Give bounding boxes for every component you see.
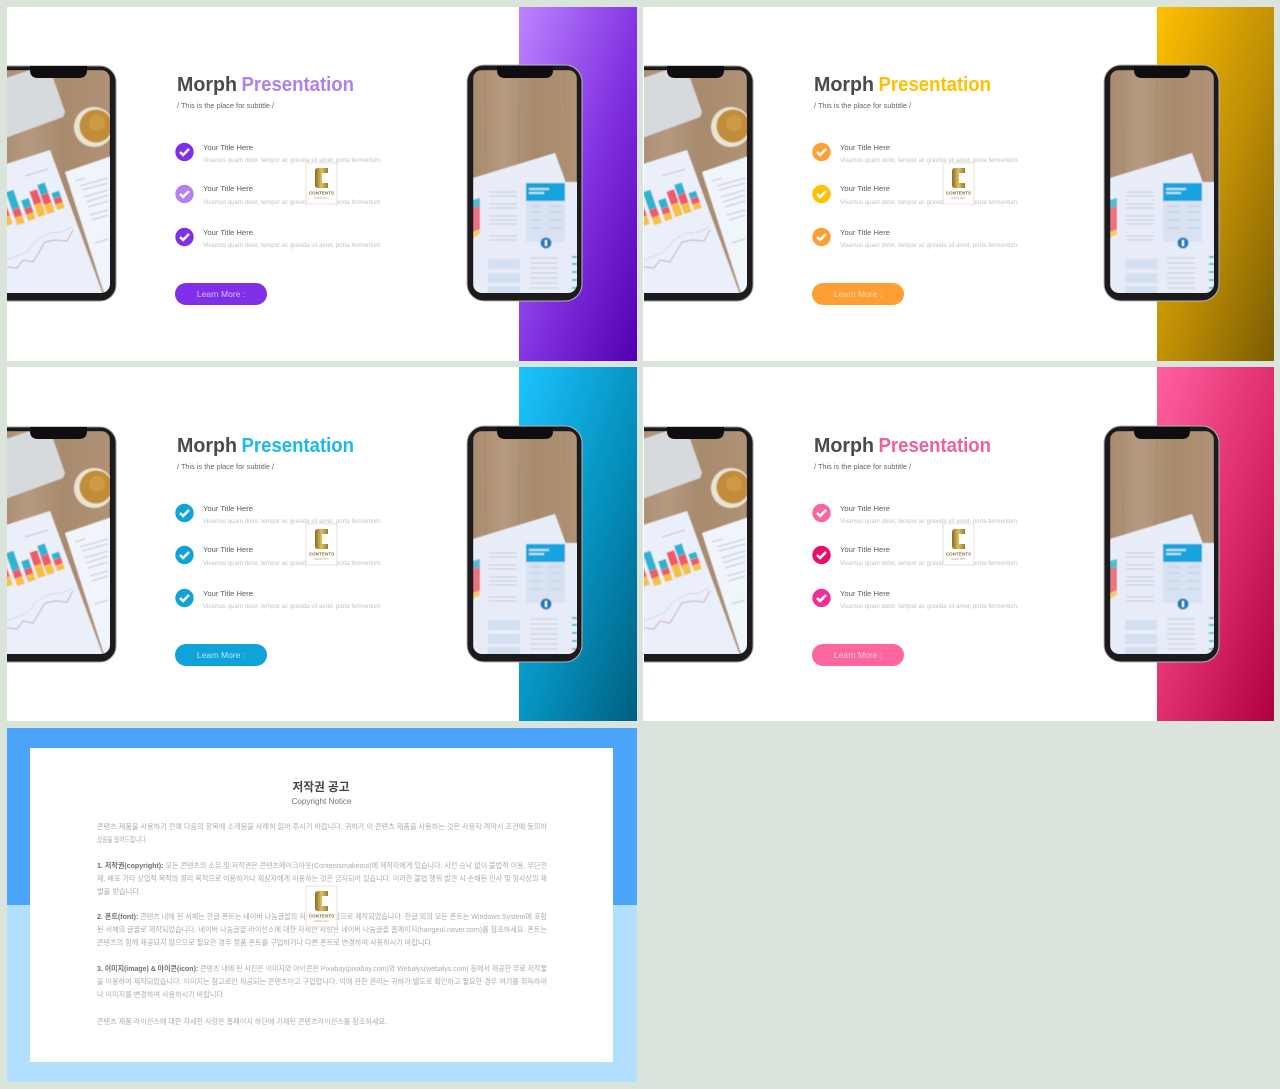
section 3: image and icon	[97, 963, 547, 999]
list item 3	[812, 228, 1019, 249]
icon: check	[812, 546, 831, 564]
list item 2: Vivamus quam dolor, tempor ac gravida sit amet, porta fermentum.	[203, 200, 382, 206]
section 1: copyright	[97, 860, 547, 896]
button: Learn More :	[197, 650, 245, 660]
list item 1: Your Title Here	[203, 143, 253, 152]
section 1: copyright: 벌을 받습니다.	[97, 886, 141, 896]
right phone mockup	[1104, 426, 1219, 662]
icon: check	[812, 504, 831, 522]
gradient band	[519, 7, 637, 361]
list item 3: Your Title Here	[840, 228, 890, 237]
section 3: image and icon: 3. 이미지(image) & 아이콘(icon): 콘텐츠 내에 된 사진은 이미지와 아이콘은 Pixabay(pixabay.com)와 Webalys(webalys.com) 등에서 제공한 무료 저작물	[97, 963, 547, 973]
list item 1: Vivamus quam dolor, tempor ac gravida sit amet, porta fermentum.	[203, 158, 382, 164]
watermark	[306, 886, 337, 927]
watermark	[306, 163, 337, 204]
list item 1: Your Title Here	[840, 143, 890, 152]
list item 1	[812, 143, 1019, 164]
gradient band	[519, 367, 637, 721]
heading: Morph	[814, 435, 874, 457]
subtitle: / This is the place for subtitle /	[814, 462, 912, 471]
right phone mockup	[467, 65, 582, 301]
intro text	[97, 821, 547, 844]
left phone mockup	[0, 66, 116, 301]
watermark	[306, 524, 337, 565]
right phone mockup	[1104, 65, 1219, 301]
list item 3: Vivamus quam dolor, tempor ac gravida sit amet, porta fermentum.	[840, 243, 1019, 249]
subtitle: / This is the place for subtitle /	[177, 462, 275, 471]
list item 3: Vivamus quam dolor, tempor ac gravida sit amet, porta fermentum.	[840, 604, 1019, 610]
list item 2: Your Title Here	[203, 545, 253, 554]
heading	[814, 74, 991, 96]
watermark	[943, 524, 974, 565]
gradient band	[1157, 7, 1274, 361]
list item 2: Vivamus quam dolor, tempor ac gravida sit amet, porta fermentum.	[840, 200, 1019, 206]
button	[175, 283, 267, 305]
list item 3: Your Title Here	[203, 228, 253, 237]
list item 3: Your Title Here	[203, 589, 253, 598]
right phone mockup	[467, 426, 582, 662]
button	[812, 283, 904, 305]
list item 1: Your Title Here	[203, 504, 253, 513]
button: Learn More :	[834, 650, 882, 660]
section 2: font: 된 서체의 글꼴로 제작되었습니다. 네이버 나눔글꼴 라이선스에 대한 자세한 사항은 네이버 나눔글꼴 홈페이지(hangeul.naver.com)를 참조하세요. 폰트는	[97, 924, 547, 934]
heading	[814, 435, 991, 457]
subtitle: / This is the place for subtitle /	[814, 101, 912, 110]
heading: Presentation	[878, 435, 991, 457]
section 3: image and icon: 나 이미지를 변경하여 사용하시기 바랍니다.	[97, 989, 225, 999]
list item 1	[175, 504, 382, 525]
panel: pink slide	[623, 367, 1274, 721]
list item 3	[175, 228, 382, 249]
list item 3: Vivamus quam dolor, tempor ac gravida sit amet, porta fermentum.	[203, 604, 382, 610]
panel: copyright notice	[7, 728, 637, 1082]
icon: check	[175, 143, 194, 161]
icon: check	[175, 185, 194, 203]
icon: check	[812, 143, 831, 161]
closing note: 콘텐츠 제품 라이선스에 대한 자세한 사항은 홈페이지 하단에 기재된 콘텐츠라이선스를 참조하세요.	[97, 1016, 387, 1026]
icon: check	[175, 546, 194, 564]
heading	[177, 435, 354, 457]
heading: Presentation	[242, 74, 354, 96]
section 2: font: 2. 폰트(font): 콘텐츠 내에 된 서체는 한글 폰트는 네이버 나눔글꼴의 저작물을 바탕으로 제작되었습니다. 한글 외의 모든 폰트는 Windows System에 포함	[97, 911, 547, 921]
subtitle: / This is the place for subtitle /	[177, 101, 275, 110]
list item 3: Vivamus quam dolor, tempor ac gravida sit amet, porta fermentum.	[203, 243, 382, 249]
list item 3	[175, 589, 382, 610]
panel: orange slide	[623, 7, 1274, 361]
heading: Morph	[177, 74, 237, 96]
list item 1	[812, 504, 1019, 525]
section 2: font: 콘텐츠의 함께 제공되지 않으므로 필요한 경우 정품 폰트를 구입하거나 다른 폰트로 변경하여 사용하시기 바랍니다.	[97, 937, 433, 947]
icon: check	[175, 504, 194, 522]
heading	[177, 74, 354, 96]
icon: check	[812, 185, 831, 203]
heading: Morph	[814, 74, 874, 96]
heading: Presentation	[242, 435, 354, 457]
button: Learn More :	[197, 289, 245, 299]
gradient band	[1157, 367, 1274, 721]
list item 2	[175, 184, 382, 206]
list item 2	[812, 545, 1019, 567]
icon: check	[812, 589, 831, 607]
list item 2: Vivamus quam dolor, tempor ac gravida sit amet, porta fermentum.	[203, 561, 382, 567]
heading: 저작권 공고	[292, 779, 350, 794]
left phone mockup	[623, 66, 753, 301]
list item 1	[175, 143, 382, 164]
list item 2: Your Title Here	[840, 545, 890, 554]
button	[812, 644, 904, 666]
panel: blue slide	[0, 367, 637, 721]
section 1: copyright: 재, 배포 기타 상업적 목적의 영리 목적으로 이용하거나 제삼자에게 이용하는 것은 금지되어 있습니다. 이러한 불법 행위 발견 시 손해된 민사 및 형사상의 제	[97, 873, 547, 883]
heading: Morph	[177, 435, 237, 457]
list item 2: Your Title Here	[203, 184, 253, 193]
button	[175, 644, 267, 666]
list item 3: Your Title Here	[840, 589, 890, 598]
icon: check	[812, 228, 831, 246]
left phone mockup	[0, 427, 116, 662]
watermark	[943, 163, 974, 204]
icon: check	[175, 228, 194, 246]
heading: Presentation	[878, 74, 991, 96]
list item 1: Vivamus quam dolor, tempor ac gravida sit amet, porta fermentum.	[840, 519, 1019, 525]
list item 2	[175, 545, 382, 567]
icon: check	[175, 589, 194, 607]
intro text: 콘텐츠 제품을 사용하기 전에 다음의 항목에 소개됨을 사례히 읽어 주시기 바랍니다. 귀하가 이 콘텐츠 제품을 사용하는 것은 사용자 계약서 조건에 동의하	[97, 821, 547, 831]
section 1: copyright: 1. 저작권(copyright): 모든 콘텐츠의 소유 및 저작권은 콘텐츠메이크아웃(Contentsmakeout)에 제작자에게 있습니다. 사전 승낙 없이 불법적 이용, 무단전	[97, 860, 547, 870]
panel: purple slide	[0, 7, 637, 361]
list item 2: Your Title Here	[840, 184, 890, 193]
left phone mockup	[623, 427, 753, 662]
list item 2: Vivamus quam dolor, tempor ac gravida sit amet, porta fermentum.	[840, 561, 1019, 567]
list item 1: Vivamus quam dolor, tempor ac gravida sit amet, porta fermentum.	[840, 158, 1019, 164]
list item 2	[812, 184, 1019, 206]
section 2: font	[97, 911, 547, 947]
button: Learn More :	[834, 289, 882, 299]
subheading: Copyright Notice	[292, 797, 352, 806]
section 3: image and icon: 을 이용하여 제작되었습니다. 이미지는 참고로만 제공되는 콘텐츠이고 구입합니다. 이에 관한 권리는 귀하가 별도로 확인하고 필요한 경우 여기를 취득하여	[97, 976, 547, 986]
list item 1: Vivamus quam dolor, tempor ac gravida sit amet, porta fermentum.	[203, 519, 382, 525]
intro text: 셨음을 알려드립니다.	[97, 834, 147, 844]
list item 3	[812, 589, 1019, 610]
list item 1: Your Title Here	[840, 504, 890, 513]
